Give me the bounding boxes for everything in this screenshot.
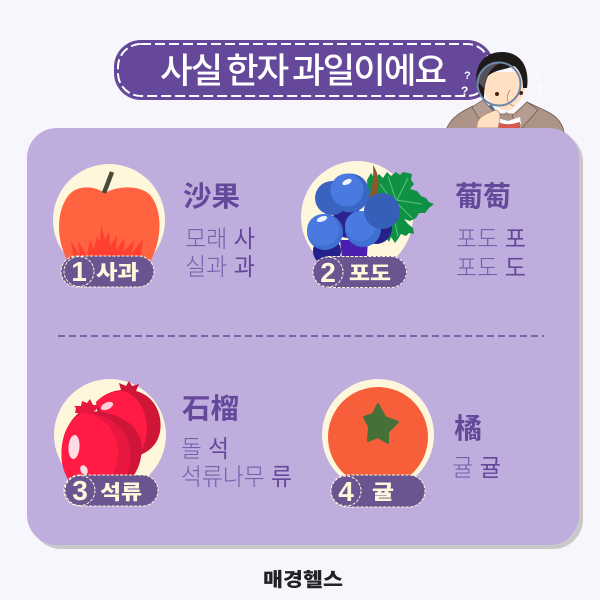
icon: tangerine	[322, 379, 434, 491]
divider	[58, 335, 544, 337]
text: apple meanings: 실과 과	[185, 247, 255, 282]
icon: pomegranate	[54, 379, 166, 491]
panel: grapes	[301, 161, 526, 288]
heading: 沙果: 沙果	[183, 175, 240, 215]
text: tangerine meaning: 귤 귤	[452, 448, 501, 483]
footer: source logo: 매경헬스	[263, 565, 343, 592]
panel: pomegranate	[54, 379, 292, 506]
character with magnifying glass: ?	[536, 81, 543, 95]
badge: 3 석류	[64, 475, 158, 506]
panel: tangerine	[322, 379, 501, 507]
badge: 3 석류: 석류	[100, 476, 142, 505]
badge: 2 포도	[313, 256, 407, 288]
badge: 1 사과	[61, 256, 154, 287]
character with magnifying glass: ?	[464, 70, 471, 82]
badge: 4 귤: 4	[338, 476, 354, 507]
panel: apple	[53, 164, 255, 287]
heading: 橘: 橘	[454, 407, 482, 447]
character with magnifying glass: ?	[533, 68, 540, 80]
main panel	[27, 128, 583, 549]
badge: 1 사과: 사과	[96, 256, 139, 285]
text: pomegranate meanings: 석류나무 류	[181, 457, 292, 492]
title banner: 사실 한자 과일이에요	[160, 43, 446, 94]
title banner	[114, 40, 494, 100]
badge: 3 석류: 3	[72, 475, 88, 506]
badge: 4 귤	[331, 475, 425, 507]
heading: 石榴: 石榴	[182, 387, 239, 427]
text: grape meanings: 포도 포	[456, 219, 526, 254]
text: pomegranate meanings: 돌 석	[181, 429, 229, 464]
character with magnifying glass: ?	[461, 84, 468, 98]
icon: grapes	[301, 161, 434, 273]
badge: 1 사과: 1	[71, 256, 87, 287]
text: apple meanings	[185, 219, 255, 282]
text: apple meanings: 모래 사	[185, 219, 255, 254]
badge: 2 포도: 포도	[349, 257, 391, 286]
text: grape meanings: 포도 도	[456, 248, 526, 283]
character with magnifying glass	[446, 52, 564, 132]
text: pomegranate meanings	[181, 429, 292, 492]
text: grape meanings	[456, 219, 526, 283]
badge: 2 포도: 2	[320, 257, 336, 288]
heading: 葡萄: 葡萄	[455, 175, 511, 215]
icon: apple	[53, 164, 165, 276]
badge: 4 귤: 귤	[372, 476, 394, 505]
